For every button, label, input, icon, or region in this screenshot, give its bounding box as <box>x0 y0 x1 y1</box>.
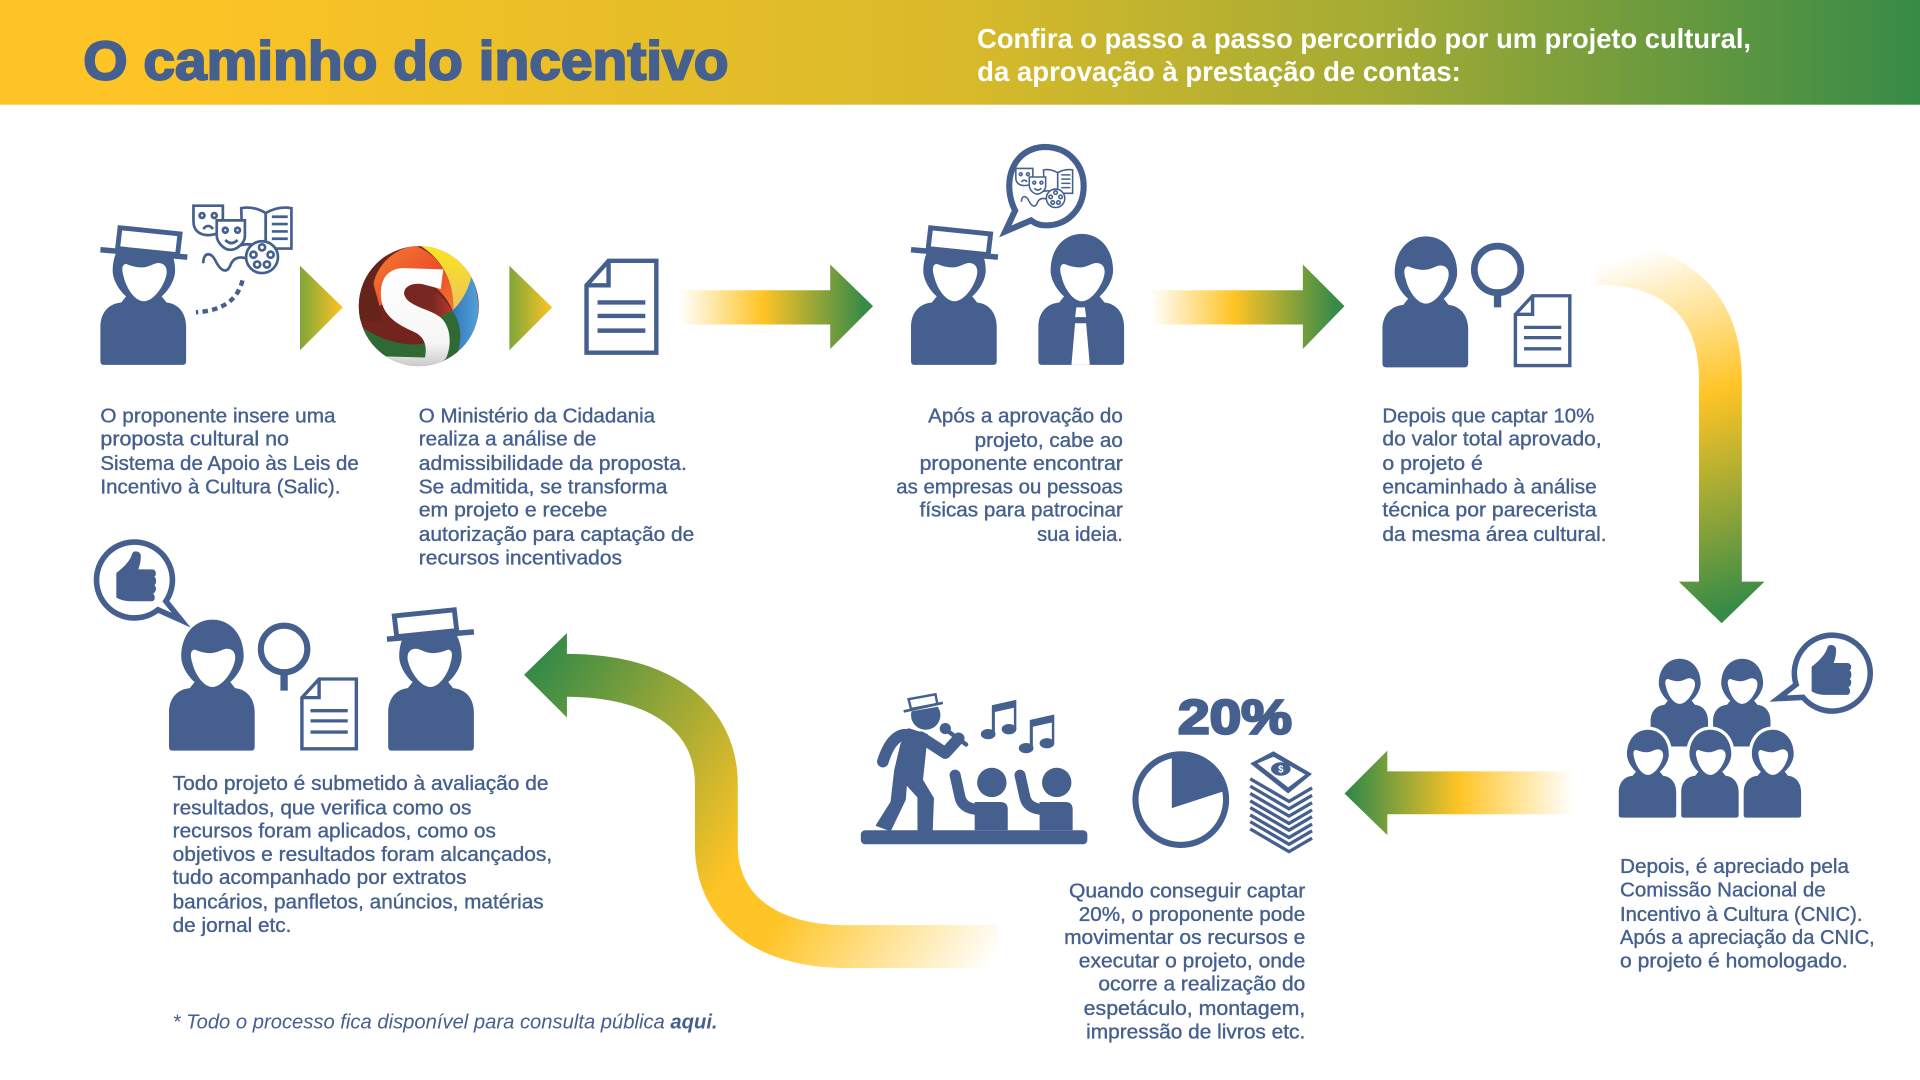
text: step 7: bancários, panfletos, anúncios, matérias <box>173 892 544 914</box>
arrow: step 2 to 3 <box>680 264 873 349</box>
icon: speech bubble with culture symbols <box>1005 147 1084 231</box>
label: 20%: 20% <box>1178 691 1292 744</box>
text: step 4 <box>1382 405 1607 546</box>
icon: document <box>587 261 656 353</box>
arrow: curved step 4 to 5 <box>1596 263 1764 623</box>
text: step 7: recursos foram aplicados, como os <box>173 821 496 843</box>
subtitle <box>977 23 1751 87</box>
icon: review document <box>1515 296 1570 366</box>
arrow: step 3 to 4 <box>1151 264 1344 349</box>
icon: proponent with hat <box>100 222 187 365</box>
icon: proponent with hat and speech bubble <box>911 222 998 365</box>
text: step 6: 20%, o proponente pode <box>1079 904 1305 926</box>
text: step 7: objetivos e resultados foram alcançados, <box>173 844 552 866</box>
icon: evaluation document <box>302 679 356 749</box>
icon: sponsor with tie <box>1038 234 1124 365</box>
text: step 2: O Ministério da Cidadania <box>419 405 656 427</box>
text: step 3: as empresas ou pessoas <box>896 476 1123 498</box>
text: step 6: movimentar os recursos e <box>1064 927 1305 949</box>
icon: money stack: $ <box>1278 765 1284 776</box>
text: step 4: técnica por parecerista <box>1382 500 1598 522</box>
arrow: step 5 to 6 <box>1344 751 1573 835</box>
text: step 5: Comissão Nacional de <box>1620 879 1826 901</box>
text: step 4: Depois que captar 10% <box>1382 405 1594 427</box>
icon: thumbs-up bubble right <box>1778 635 1870 711</box>
icon: evaluation magnifier <box>261 626 307 691</box>
text: step 2: Se admitida, se transforma <box>419 476 668 498</box>
icon: proponent with hat, bottom <box>387 604 474 751</box>
icon: dotted path <box>196 280 242 312</box>
text: step 3: sua ideia. <box>1037 524 1123 546</box>
icon: Salic logo <box>358 246 479 366</box>
text: step 4: do valor total aprovado, <box>1382 429 1602 451</box>
text: step 7: de jornal etc. <box>173 915 291 937</box>
icon: thumbs-up bubble left <box>96 542 181 620</box>
header banner <box>0 0 1920 105</box>
title: O caminho do incentivo <box>83 30 729 92</box>
text: step 3 <box>896 405 1123 546</box>
text: step 4: da mesma área cultural. <box>1382 524 1607 546</box>
text: step 7: resultados, que verifica como os <box>173 797 471 819</box>
text: step 4: encaminhado à análise <box>1382 476 1597 498</box>
arrow: curved step 6 to 7 <box>524 633 998 947</box>
icon: evaluator <box>169 620 255 751</box>
text: step 1: proposta cultural no <box>100 429 289 451</box>
text: step 2: recursos incentivados <box>419 547 622 569</box>
icon: CNIC group <box>1619 659 1801 818</box>
text: step 7 <box>173 773 552 937</box>
arrowhead: step 2 <box>509 266 552 350</box>
text: step 3: proponente encontrar <box>920 453 1123 475</box>
text: step 6: Quando conseguir captar <box>1069 881 1306 903</box>
icon: culture symbols <box>193 206 291 273</box>
text: step 1: Sistema de Apoio às Leis de <box>100 453 359 475</box>
icon: singer and audience <box>861 692 1087 844</box>
text: step 7: Todo projeto é submetido à avaliação de <box>173 773 549 795</box>
text: step 2: em projeto e recebe <box>419 500 607 522</box>
text: step 5: o projeto é homologado. <box>1620 950 1848 972</box>
text: step 5 <box>1620 856 1875 972</box>
text: step 5: Após a apreciação da CNIC, <box>1620 927 1875 949</box>
text: step 2: autorização para captação de <box>419 524 694 546</box>
text: step 4: o projeto é <box>1382 453 1483 475</box>
text: step 5: Depois, é apreciado pela <box>1620 856 1850 878</box>
subtitle: Confira o passo a passo percorrido por um projeto cultural, <box>977 23 1751 54</box>
text: step 5: Incentivo à Cultura (CNIC). <box>1620 904 1862 926</box>
text: step 3: físicas para patrocinar <box>920 500 1123 522</box>
icon: money stack <box>1250 751 1312 852</box>
text: step 2 <box>419 405 694 569</box>
text: step 1: Incentivo à Cultura (Salic). <box>100 476 340 498</box>
icon: pie chart <box>1135 754 1226 845</box>
text: step 7: tudo acompanhado por extratos <box>173 867 467 889</box>
footnote: * Todo o processo fica disponível para consulta pública aqui. <box>173 1012 718 1034</box>
text: step 6 <box>1064 881 1306 1043</box>
text: step 6: impressão de livros etc. <box>1086 1021 1305 1043</box>
text: step 3: projeto, cabe ao <box>975 430 1123 452</box>
text: step 2: realiza a análise de <box>419 429 596 451</box>
text: step 1: O proponente insere uma <box>100 405 336 427</box>
text: step 3: Após a aprovação do <box>928 405 1123 427</box>
text: step 6: executar o projeto, onde <box>1079 950 1305 972</box>
icon: magnifier <box>1474 246 1521 307</box>
text: step 6: ocorre a realização do <box>1098 974 1305 996</box>
text: step 2: admissibilidade da proposta. <box>419 453 687 475</box>
subtitle: da aprovação à prestação de contas: <box>977 56 1461 87</box>
icon: reviewer <box>1382 236 1468 367</box>
arrowhead: step 1 <box>300 266 343 350</box>
text: step 1 <box>100 405 359 498</box>
text: step 6: espetáculo, montagem, <box>1084 998 1305 1020</box>
